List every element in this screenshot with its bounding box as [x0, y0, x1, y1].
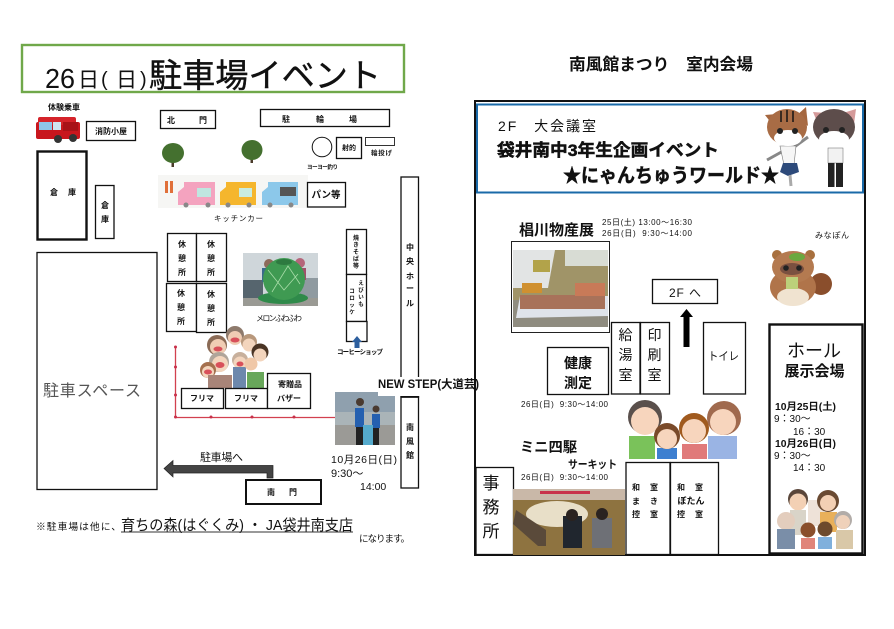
stall: ebi-imo croquette — [346, 274, 366, 322]
stall: yakisoba: ば — [353, 255, 359, 263]
box: small storehouse — [96, 186, 114, 238]
box: health check: 測定 — [564, 375, 592, 391]
label: mascot minapon: みなぽん — [815, 231, 849, 240]
box: bread stall: パン等 — [312, 189, 341, 201]
stall: ebi-imo croquette: び — [358, 286, 364, 294]
box: central hall: 中 — [406, 242, 414, 252]
title: outdoor parking lot event: 日 — [116, 69, 137, 92]
box: toilet: トイレ — [708, 351, 739, 363]
box: donated goods bazaar: バザー — [277, 394, 301, 403]
stall: ebi-imo croquette: も — [358, 301, 364, 308]
stall: ebi-imo croquette: ケ — [349, 308, 355, 316]
note: other parking lots — [36, 517, 410, 545]
box: nanpukan: 館 — [406, 450, 414, 460]
panel: hall exhibition: 14：30 — [793, 463, 826, 474]
box: central hall: ル — [406, 299, 414, 308]
text: street performance time — [331, 454, 397, 493]
box: waiting room maki: ま — [632, 497, 640, 506]
illustration: cat mascot girl — [765, 107, 808, 186]
stall: yakisoba: そ — [353, 249, 359, 256]
box: rest area 2: 休 — [207, 239, 215, 249]
box: ring toss: 輪投げ — [371, 148, 392, 157]
text: street performance time: 14:00 — [360, 481, 386, 493]
box: donated goods bazaar — [268, 374, 310, 408]
box: north gate: 北 — [167, 115, 175, 125]
stall: ebi-imo croquette: ロ — [349, 295, 355, 302]
title: outdoor parking lot event — [22, 45, 404, 94]
stall: ebi-imo croquette: コ — [349, 288, 355, 295]
text: street performance time: 9:30～ — [331, 468, 363, 480]
title: outdoor parking lot event: ( — [101, 69, 108, 91]
icon: fire truck — [36, 117, 80, 143]
panel: 2F banner — [477, 104, 863, 192]
title: outdoor parking lot event: 日 — [78, 69, 99, 92]
box: toilet — [704, 322, 746, 394]
label: mini 4WD circuit: 26日(日) 9:30～14:00 — [521, 473, 609, 482]
panel: 2F banner: 袋井南中3年生企画イベント — [497, 140, 719, 160]
box: fire shed — [86, 122, 136, 140]
illustration: tanuki mascot — [770, 250, 832, 306]
box: print room: 室 — [648, 367, 662, 383]
box: to 2F — [652, 280, 718, 304]
box: waiting room botan: ぼたん — [677, 495, 705, 506]
arrow: up to 2F — [680, 309, 693, 347]
image: mini 4WD photo — [513, 489, 625, 555]
note: other parking lots: ※駐車場は他に、 — [36, 520, 121, 533]
box: print room: 刷 — [648, 347, 662, 363]
box: waiting room maki: 和 — [632, 482, 640, 492]
box: bread stall — [308, 182, 346, 207]
box: rest area 3: 休 — [177, 288, 185, 298]
panel: hall exhibition: ホール — [787, 341, 841, 361]
box: kitchenette: 給 — [618, 327, 632, 343]
panel: 2F banner: 2F 大会議室 — [498, 118, 596, 134]
box: office — [476, 468, 514, 554]
label: melon bouncy: メロンふわふわ — [256, 314, 302, 323]
box: bicycle parking: 駐 — [282, 114, 290, 124]
image: street performers photo — [335, 392, 395, 445]
panel: indoor venue outline — [475, 101, 865, 555]
box: waiting room maki — [626, 462, 670, 554]
box: ring toss — [366, 138, 394, 157]
box: waiting room maki: 室 — [650, 482, 658, 492]
box: rest area 4: 憩 — [207, 303, 215, 313]
box: office: 務 — [482, 498, 500, 517]
box: central hall: ホ — [406, 272, 414, 281]
box: south gate: 南 — [267, 487, 275, 497]
box: waiting room botan: 和 — [677, 482, 685, 492]
label: local products fair: 25日(土) 13:00～16:30 — [602, 217, 693, 227]
panel: hall exhibition: 16：30 — [793, 427, 826, 438]
box: rest area 4: 所 — [207, 317, 215, 327]
stall: ebi-imo croquette: え — [358, 280, 364, 287]
box: rest area 2: 所 — [207, 267, 215, 277]
box: kitchenette: 室 — [618, 367, 632, 383]
box: fire shed: 消防小屋 — [95, 126, 127, 136]
illustration: family of four — [628, 400, 741, 459]
box: kitchenette — [612, 322, 640, 394]
box: nanpukan: 南 — [406, 422, 414, 432]
box: central hall — [401, 177, 418, 397]
arrow: to parking — [164, 460, 273, 478]
box: rest area 3 — [166, 284, 196, 332]
stall: coffee shop — [337, 322, 384, 356]
box: flea market 2 — [226, 388, 268, 408]
text: street performance time: 10月26日(日) — [331, 454, 397, 466]
box: waiting room maki: 室 — [650, 509, 658, 519]
label: local products fair: 椙川物産展 — [519, 221, 594, 239]
box: large storehouse — [38, 152, 86, 240]
box: nanpukan: 風 — [406, 437, 414, 446]
label: street performance — [378, 377, 479, 398]
panel: hall exhibition: 展示会場 — [784, 363, 845, 380]
image: melon bouncy castle — [243, 253, 318, 306]
box: kitchenette: 湯 — [618, 347, 632, 363]
panel: hall exhibition: 10月25日(土) — [775, 400, 836, 413]
box: health check: 健康 — [564, 355, 592, 371]
box: rest area 1: 憩 — [178, 253, 186, 263]
label: fire truck ride: 体験乗車 — [48, 102, 80, 112]
box: office: 事 — [482, 474, 500, 493]
box: waiting room botan: 室 — [695, 509, 703, 519]
icon: tree right — [242, 140, 262, 163]
box: nanpukan — [401, 397, 418, 488]
box: waiting room botan: 控 — [677, 509, 685, 519]
box: to 2F: 2F へ — [669, 286, 701, 300]
stall: coffee shop: コーヒーショップ — [337, 348, 384, 356]
panel: hall exhibition: 9：30～ — [774, 414, 811, 425]
label: mini 4WD circuit — [520, 439, 617, 482]
text: health check time: 26日(日) 9:30～14:00 — [521, 400, 609, 409]
stall: yakisoba: 等 — [353, 262, 359, 270]
box: shooting game — [336, 138, 362, 158]
box: rest area 1: 所 — [178, 267, 186, 277]
heading: indoor venue: 南風館まつり 室内会場 — [569, 55, 753, 74]
box: parking space — [37, 252, 157, 490]
box: large storehouse: 庫 — [68, 187, 76, 197]
box: rest area 4: 休 — [207, 289, 215, 299]
label: local products fair — [519, 217, 693, 239]
image: local products photo — [512, 242, 610, 332]
box: shooting game: 射的 — [342, 143, 356, 152]
label: mini 4WD circuit: ミニ四駆 — [520, 439, 577, 455]
panel: hall exhibition: 9：30～ — [774, 451, 811, 462]
box: small storehouse: 倉 — [101, 200, 109, 210]
box: north gate — [160, 110, 216, 128]
box: rest area 4 — [196, 284, 226, 332]
box: rest area 3: 所 — [177, 316, 185, 326]
box: waiting room maki: き — [650, 497, 658, 506]
box: print room — [640, 322, 670, 394]
label: kitchen car: キッチンカー — [214, 214, 263, 223]
box: central hall: ー — [406, 284, 414, 293]
box: bicycle parking: 輪 — [316, 114, 324, 124]
box: flea market 1 — [182, 388, 224, 408]
icon: tree left — [162, 143, 184, 167]
box: bicycle parking: 場 — [349, 114, 357, 124]
box: waiting room botan — [670, 462, 718, 554]
stall: yakisoba: 焼 — [353, 234, 359, 242]
box: waiting room botan: 室 — [695, 482, 703, 492]
box: donated goods bazaar: 寄贈品 — [278, 379, 302, 389]
title: outdoor parking lot event: 駐車場イベント — [149, 57, 381, 94]
box: bicycle parking — [260, 110, 390, 126]
box: rest area 1: 休 — [178, 239, 186, 249]
icon: yo-yo fishing pool — [307, 137, 338, 171]
box: north gate: 門 — [199, 116, 207, 125]
panel: hall exhibition: 10月26日(日) — [775, 438, 836, 450]
box: rest area 2: 憩 — [207, 253, 215, 263]
box: south gate: 門 — [289, 488, 297, 497]
box: print room: 印 — [648, 327, 662, 343]
stall: ebi-imo croquette: い — [358, 294, 364, 301]
image: kitchen cars — [158, 175, 308, 208]
box: flea market 2: フリマ — [234, 394, 258, 403]
title: outdoor parking lot event: ) — [140, 69, 147, 91]
box: rest area 1 — [168, 234, 196, 282]
note: other parking lots: 育ちの森(はぐくみ) ・ JA袋井南支店 — [121, 517, 353, 534]
box: health check — [548, 348, 608, 394]
note: other parking lots: になります。 — [359, 534, 410, 545]
illustration: cat mascot boy — [813, 109, 856, 187]
box: waiting room maki: 控 — [632, 509, 640, 519]
marker line: red parade route — [174, 346, 335, 418]
label: to parking: 駐車場へ — [200, 450, 243, 464]
box: small storehouse: 庫 — [101, 214, 109, 224]
stall: yakisoba — [345, 230, 368, 274]
box: rest area 3: 憩 — [177, 302, 185, 312]
label: street performance: NEW STEP(大道芸) — [378, 377, 479, 391]
box: rest area 2 — [196, 234, 226, 282]
box: south gate — [246, 480, 321, 504]
stall: ebi-imo croquette: ッ — [349, 303, 355, 309]
label: mini 4WD circuit: サーキット — [568, 458, 617, 471]
box: parking space: 駐車スペース — [43, 382, 141, 400]
box: large storehouse: 倉 — [50, 187, 58, 197]
title: outdoor parking lot event: 26 — [45, 63, 75, 94]
panel: hall exhibition — [770, 324, 862, 554]
stall: yakisoba: き — [353, 242, 359, 249]
illustration: crowd of people — [200, 326, 268, 388]
box: central hall: 央 — [406, 256, 414, 266]
illustration: three generations family — [777, 489, 853, 549]
box: office: 所 — [482, 522, 500, 541]
panel: 2F banner: ★にゃんちゅうワールド★ — [563, 165, 779, 187]
label: local products fair: 26日(日) 9:30～14:00 — [602, 229, 693, 238]
box: flea market 1: フリマ — [190, 394, 214, 403]
icon: yo-yo fishing pool: ヨーヨー釣り — [307, 163, 338, 171]
